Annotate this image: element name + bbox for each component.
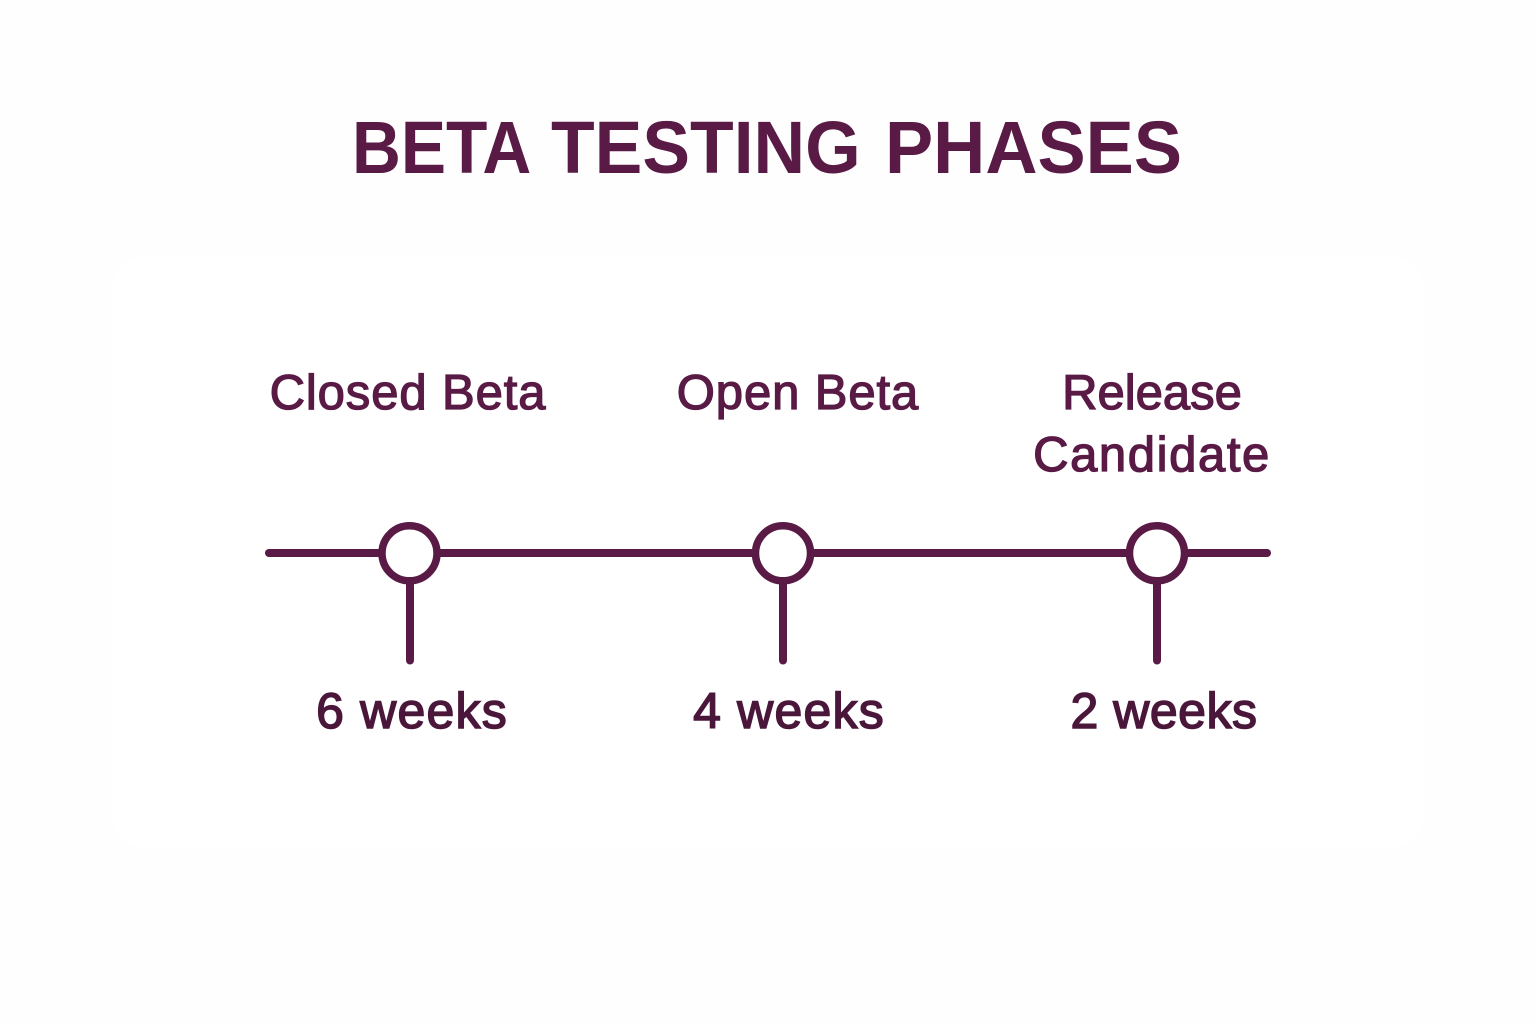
label: Closed Beta: Closed Beta bbox=[270, 366, 546, 420]
label: Release Candidate: Candidate bbox=[1033, 428, 1271, 482]
duration: 2 weeks: 2 weeks bbox=[1071, 683, 1257, 739]
title: PHASES bbox=[884, 106, 1182, 189]
title: TESTING bbox=[550, 106, 860, 189]
milestone: Closed Beta bbox=[382, 526, 437, 660]
title bbox=[352, 106, 1182, 189]
milestone: Release Candidate bbox=[1130, 526, 1184, 660]
label: Release Candidate bbox=[1033, 366, 1271, 482]
title: BETA bbox=[352, 106, 531, 189]
timeline axis bbox=[269, 549, 1267, 557]
label: Open Beta: Open Beta bbox=[677, 366, 919, 420]
panel: timeline card bbox=[112, 256, 1424, 848]
milestone: Open Beta bbox=[756, 526, 810, 660]
duration: 6 weeks: 6 weeks bbox=[316, 683, 508, 739]
duration: 4 weeks: 4 weeks bbox=[693, 683, 885, 739]
label: Release Candidate: Release bbox=[1062, 366, 1242, 420]
